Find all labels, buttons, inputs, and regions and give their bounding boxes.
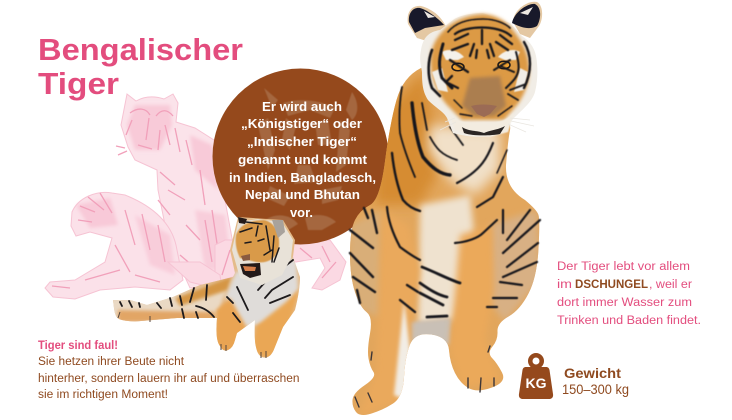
text: weight: 150–300 kg xyxy=(562,382,629,397)
title: Bengalischer xyxy=(38,32,243,67)
pink body behind xyxy=(168,220,346,290)
text: Dschungel: Trinken und Baden findet. xyxy=(557,315,701,327)
pink lying tiger xyxy=(45,192,183,299)
circle text: Nepal und Bhutan xyxy=(245,188,360,202)
sitting tiger photo xyxy=(348,2,542,418)
text: Tiger sind faul: hinterher, sondern lauern ihr auf und überraschen xyxy=(38,373,300,385)
text: Dschungel xyxy=(557,261,701,327)
text: Dschungel: im xyxy=(557,279,572,291)
icon: kg weight xyxy=(519,353,553,399)
circle text: genannt und kommt xyxy=(238,153,368,167)
circle text: vor. xyxy=(290,206,313,220)
text: weight: Gewicht xyxy=(564,366,622,381)
circle text: Er wird auch xyxy=(262,100,342,114)
illustration: pink engraved tigers xyxy=(45,94,346,299)
text: Dschungel: DSCHUNGEL xyxy=(575,279,648,291)
sitting tiger body xyxy=(348,66,540,418)
text: Tiger sind faul: Sie hetzen ihrer Beute nicht xyxy=(38,356,185,368)
sitting tiger head xyxy=(420,13,537,137)
circle text: in Indien, Bangladesch, xyxy=(229,171,376,185)
text: Dschungel: Der Tiger lebt vor allem xyxy=(557,261,690,273)
circle text xyxy=(229,100,376,220)
text: weight xyxy=(562,366,629,397)
pink standing tiger xyxy=(116,94,240,288)
lying tiger head xyxy=(232,217,293,285)
lying tiger body xyxy=(110,217,300,360)
text: Tiger sind faul xyxy=(38,340,300,401)
circle text: „Indischer Tiger“ xyxy=(247,135,357,149)
circle text: „Königstiger“ oder xyxy=(241,117,362,131)
text: Tiger sind faul: sie im richtigen Moment! xyxy=(38,389,168,401)
icon: kg weight: KG xyxy=(526,375,547,391)
text: Dschungel: dort immer Wasser zum xyxy=(557,297,692,309)
ghost tiger face in circle xyxy=(258,88,357,232)
brown circle with intro text xyxy=(212,68,388,244)
lying tiger photo xyxy=(110,217,300,360)
title xyxy=(38,32,243,101)
sitting tiger ears xyxy=(408,2,542,42)
text: Tiger sind faul: Tiger sind faul! xyxy=(38,340,118,352)
title: Tiger xyxy=(38,66,119,101)
text: Dschungel: , weil er xyxy=(649,279,692,291)
